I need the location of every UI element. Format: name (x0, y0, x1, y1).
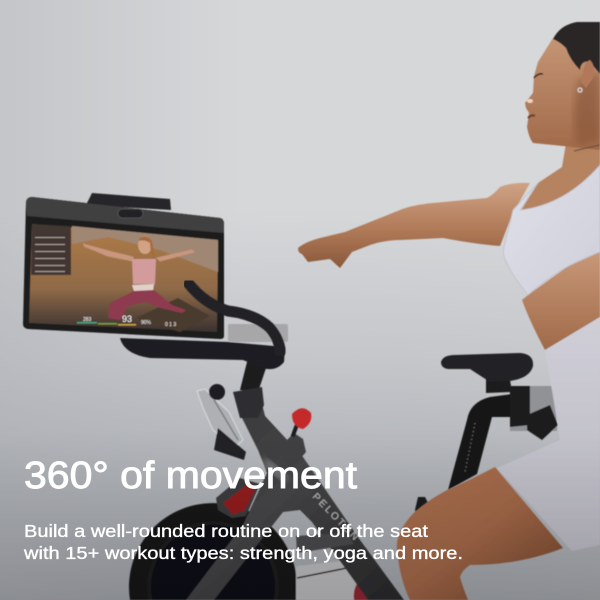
head (525, 30, 600, 150)
earring (578, 88, 582, 92)
bottle knob (209, 384, 225, 400)
instructor (83, 236, 194, 320)
lips (528, 115, 535, 118)
camera bar (86, 193, 171, 210)
face shadow (574, 72, 600, 146)
leaderboard rows (35, 237, 65, 272)
flywheel (129, 503, 297, 600)
handlebar grip (189, 284, 280, 352)
rear frame panel (296, 560, 385, 600)
phone mount (228, 324, 288, 342)
handlebar lower arm (120, 338, 285, 369)
body copy (23, 521, 463, 563)
tablet body (23, 197, 224, 339)
red brake guard (216, 478, 260, 518)
nose highlight (527, 99, 533, 103)
metrics bar: 90% (141, 320, 152, 326)
necklace (574, 145, 600, 151)
title: 360° of movement (24, 455, 357, 497)
camera button (118, 209, 143, 218)
midriff (522, 252, 600, 350)
handlebar (189, 284, 288, 352)
ear (581, 60, 594, 88)
workout video (29, 224, 218, 332)
yoga mat (136, 298, 210, 332)
rear bottle (510, 386, 558, 440)
stem (233, 362, 268, 418)
video wall (72, 226, 218, 272)
instructor top (132, 259, 156, 284)
instructor leggings (108, 290, 186, 320)
instructor waistband (132, 284, 154, 291)
class leaderboard (31, 224, 71, 275)
tablet screen (23, 193, 224, 339)
frame highlight (260, 457, 290, 483)
bottom scrim (0, 430, 600, 600)
bottle holder (214, 428, 246, 460)
resistance knob (283, 408, 311, 468)
seat clamp (486, 376, 512, 393)
body copy: with 15+ workout types: strength, yoga and more. (23, 543, 463, 563)
body copy: Build a well-rounded routine on or off the seat (24, 521, 428, 541)
video floor (29, 224, 218, 332)
bike (120, 338, 558, 600)
instructor arms (83, 244, 194, 261)
shorts (497, 317, 600, 551)
eye (534, 74, 543, 78)
neck and chest (520, 118, 600, 212)
outstretched arm (298, 183, 530, 268)
main frame (186, 404, 404, 600)
frame lower bar (296, 533, 354, 553)
pedal (415, 497, 428, 512)
hair (553, 22, 600, 74)
metrics bar (77, 314, 176, 328)
metrics bar: 0 1 3 (165, 322, 176, 328)
athlete (298, 22, 600, 600)
fabric speaker bar (26, 197, 224, 233)
metrics bar: 93 (122, 314, 132, 324)
peloton logo: PELOTON (310, 491, 362, 544)
instructor hair (139, 236, 155, 257)
metrics bar: 283 (83, 317, 92, 323)
saddle (441, 353, 533, 382)
sports bra (503, 165, 600, 295)
instructor head (138, 236, 152, 254)
thigh (397, 467, 563, 600)
water bottle (197, 389, 243, 447)
seat post (448, 394, 512, 490)
